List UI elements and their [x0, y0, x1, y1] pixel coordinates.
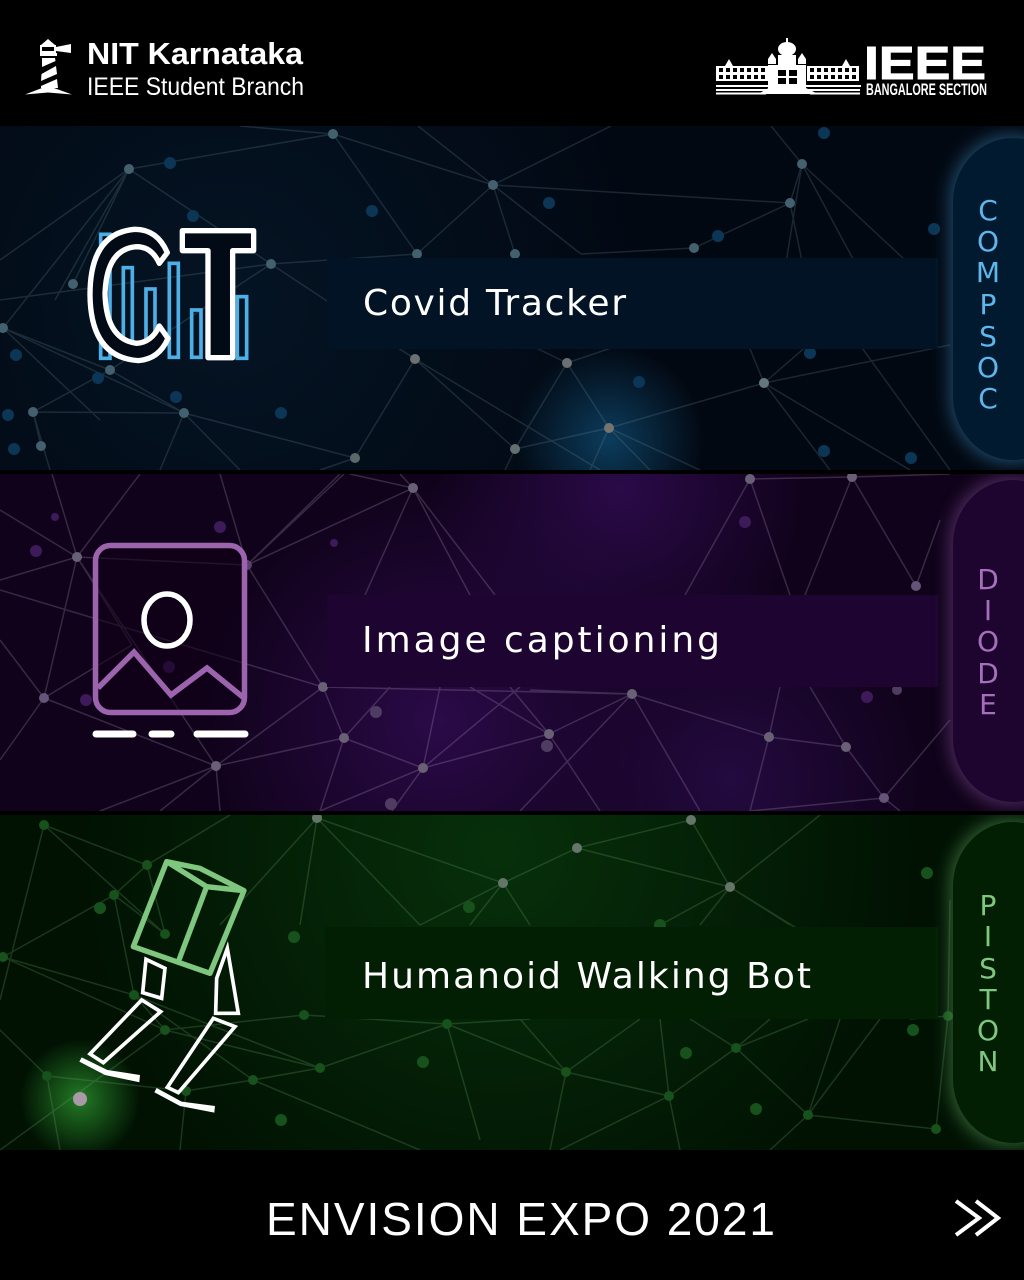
- tab text: N: [978, 1045, 998, 1078]
- robot legs: [90, 948, 238, 1093]
- side tab glow: [951, 820, 1024, 1145]
- heading: IEEE: IEEE: [864, 37, 986, 89]
- tab text: D: [977, 563, 999, 596]
- tab text: O: [977, 225, 999, 258]
- label bar: Covid Tracker: [327, 258, 938, 349]
- label bar: Humanoid Walking Bot: [325, 927, 938, 1019]
- side tab glow: [951, 136, 1024, 462]
- text: IEEE Student Branch: IEEE Student Branch: [87, 73, 304, 101]
- tab text: O: [977, 1014, 999, 1047]
- tab text: S: [979, 952, 997, 985]
- heading: NIT Karnataka: NIT Karnataka: [87, 36, 304, 71]
- tab text: P: [980, 288, 996, 321]
- icon: Vidhana Soudha building: [716, 38, 861, 94]
- robot feet: [79, 1057, 215, 1113]
- project title: Image captioning: Image captioning: [362, 620, 720, 661]
- icon: walking robot: [79, 862, 244, 1113]
- tab text: M: [976, 256, 1000, 289]
- letter T: [182, 231, 254, 358]
- tab text: [978, 895, 998, 1072]
- side tab: COMPSOC: [953, 138, 1024, 460]
- tab text: I: [984, 920, 992, 953]
- side tab: DIODE: [953, 480, 1024, 802]
- label bar: Image captioning: [327, 595, 938, 687]
- tab text: S: [979, 320, 997, 353]
- letter C: [90, 229, 168, 361]
- project title: Covid Tracker: Covid Tracker: [363, 283, 626, 324]
- side tab glow: [951, 478, 1024, 804]
- tab text: E: [979, 688, 997, 721]
- icon: CT chart logo: [90, 229, 254, 361]
- tab text: C: [978, 382, 998, 415]
- header bar: [0, 0, 1024, 126]
- tab text: O: [977, 351, 999, 384]
- arrow: double chevron: [956, 1201, 998, 1235]
- tab text: [978, 569, 998, 714]
- logo: IEEE Bangalore Section: [716, 37, 987, 99]
- project title: Humanoid Walking Bot: Humanoid Walking Bot: [362, 956, 811, 997]
- side tab: PISTON: [953, 822, 1024, 1143]
- tab text: D: [977, 657, 999, 690]
- footer title: ENVISION EXPO 2021: ENVISION EXPO 2021: [266, 1193, 775, 1245]
- logo: NIT Karnataka IEEE Student Branch: [25, 36, 304, 101]
- icon: lighthouse: [25, 39, 72, 94]
- panel: Humanoid Walking Bot (PISTON): [0, 813, 1024, 1150]
- tab text: O: [977, 625, 999, 658]
- tab text: [978, 200, 998, 409]
- bars: [101, 234, 247, 358]
- robot torso: [133, 862, 244, 973]
- tab text: P: [980, 889, 996, 922]
- panel: Covid Tracker (COMPSOC): [0, 126, 1024, 470]
- icon: image placeholder: [96, 546, 245, 734]
- tab text: C: [978, 194, 998, 227]
- tab text: I: [984, 594, 992, 627]
- tab text: T: [978, 983, 997, 1016]
- panel: Image captioning (DIODE): [0, 472, 1024, 811]
